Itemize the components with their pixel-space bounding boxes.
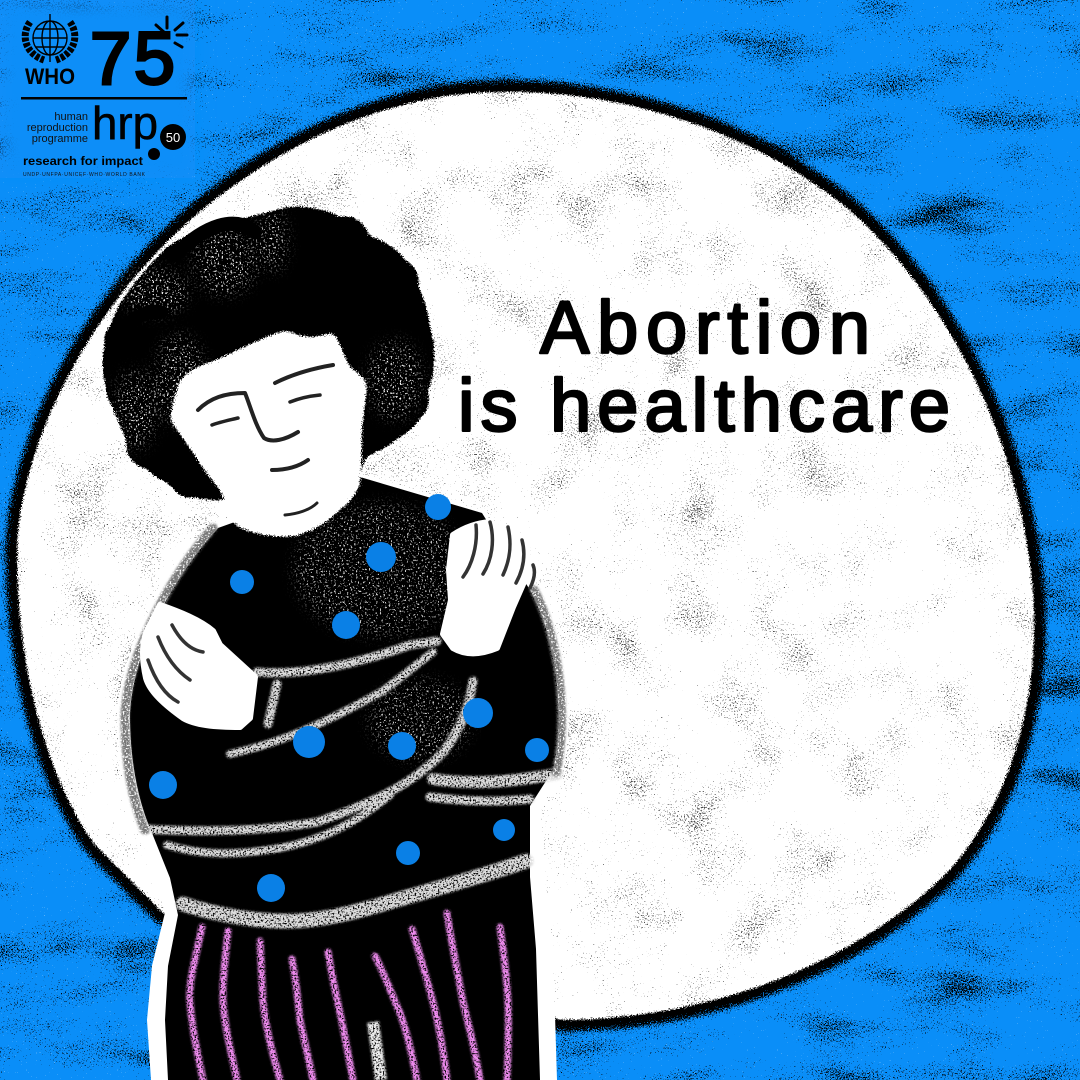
left hand <box>143 605 255 727</box>
polka dots <box>149 494 549 902</box>
garment fold lines <box>125 528 561 921</box>
headline line 1: Abortion <box>540 286 870 369</box>
trouser stripes <box>190 913 508 1080</box>
facial features <box>198 365 333 515</box>
75 anniversary mark: 75 <box>90 17 175 100</box>
face <box>170 330 367 537</box>
research for impact: research for impact <box>23 154 143 168</box>
headline line 2: is healthcare <box>458 364 950 447</box>
logos <box>21 14 187 178</box>
headline: Abortion is healthcare <box>458 286 950 447</box>
HRP descriptor <box>27 111 88 145</box>
garment texture: white chalk flecks <box>295 505 470 760</box>
divider <box>21 97 187 100</box>
hrp dot <box>148 148 160 160</box>
hrp wordmark: hrp <box>92 97 158 149</box>
partners line: UNDP·UNFPA·UNICEF·WHO·WORLD BANK <box>23 172 146 178</box>
hair highlights <box>115 210 421 448</box>
right hand <box>443 522 534 653</box>
WHO wordmark: WHO <box>25 64 75 89</box>
HRP descriptor: human <box>54 111 88 123</box>
figure: woman in polka dot top and striped trousers <box>102 207 566 1080</box>
trouser leg divider <box>373 1022 381 1080</box>
HRP descriptor: programme <box>32 133 88 145</box>
hrp 50 badge: 50 <box>166 130 180 145</box>
logo backdrop: calm blue behind logos <box>0 0 195 178</box>
body outline: white chalk edge <box>120 477 566 1080</box>
WHO emblem <box>25 14 75 62</box>
hrp 50 badge <box>160 124 186 150</box>
HRP descriptor: reproduction <box>27 122 88 134</box>
hair <box>102 207 434 500</box>
body: black garment <box>130 477 559 1080</box>
hair curl strokes <box>115 224 255 345</box>
